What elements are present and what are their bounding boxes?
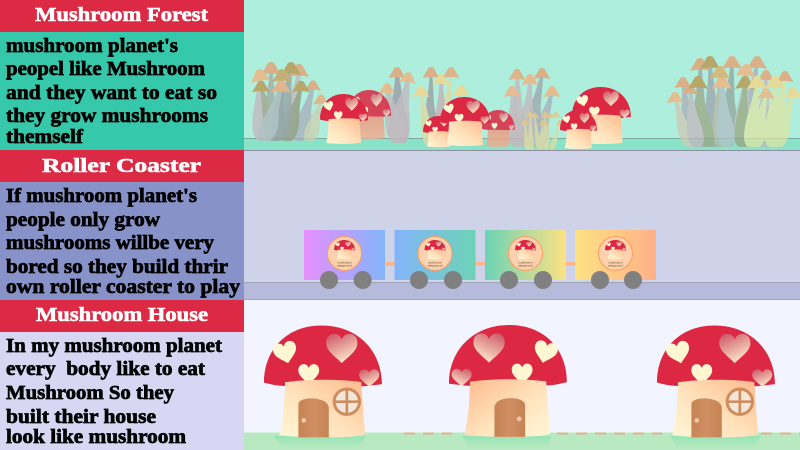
cart 2 xyxy=(394,230,476,289)
body text: roller coaster: If mushroom planet's xyxy=(6,185,197,207)
red mushroom: large right xyxy=(572,87,631,144)
body text: house: every body like to eat xyxy=(6,358,205,380)
door xyxy=(494,398,525,437)
panel: mushroom house text xyxy=(0,300,244,450)
cart 3: playground xyxy=(518,264,533,268)
red mushroom: behind centre xyxy=(482,110,515,147)
body text: house: built their house xyxy=(6,406,156,428)
cart connectors xyxy=(385,262,575,266)
heading: roller coaster: Roller Coaster xyxy=(42,155,201,177)
cart 2: mushroom xyxy=(428,260,443,264)
body text: forest: and they want to eat so xyxy=(6,82,217,104)
round window xyxy=(727,389,753,414)
body text: roller coaster: own roller coaster to play xyxy=(6,276,241,298)
door xyxy=(298,398,329,437)
heading: mushroom forest: Mushroom Forest xyxy=(35,4,208,26)
body text: forest xyxy=(6,35,217,148)
body text: forest: peopel like Mushroom xyxy=(6,58,205,80)
cart 1 xyxy=(304,230,385,289)
heading: roller coaster xyxy=(0,150,244,182)
house shadows xyxy=(273,436,761,448)
body text: roller coaster: people only grow xyxy=(6,209,160,231)
path dashes xyxy=(404,432,800,434)
cart 3 xyxy=(485,230,566,289)
body text: roller coaster xyxy=(6,185,241,298)
tall mushrooms: left cluster xyxy=(249,62,329,141)
house 2 xyxy=(449,325,567,437)
body text: house xyxy=(6,335,222,448)
tall mushrooms: middle clusters xyxy=(375,67,560,147)
cart 1: playground xyxy=(337,264,352,268)
panel: mushroom house scene xyxy=(244,300,800,450)
body text: forest: they grow mushrooms xyxy=(6,105,208,127)
cart 2: playground xyxy=(428,264,443,268)
house 1 xyxy=(264,326,382,437)
cart 4: playground xyxy=(608,264,623,268)
red mushroom: front left xyxy=(320,94,368,144)
cart 1: mushroom xyxy=(337,260,352,264)
cart 4 xyxy=(575,230,656,289)
heading: mushroom house: Mushroom House xyxy=(36,304,208,326)
round window xyxy=(334,389,360,414)
tiny mushrooms: yellow clump xyxy=(520,112,564,150)
tall mushrooms: right cluster xyxy=(666,56,800,147)
door xyxy=(691,398,722,437)
body text: forest: mushroom planet's xyxy=(6,35,178,57)
heading: mushroom forest xyxy=(0,0,244,32)
panel: roller coaster text xyxy=(0,150,244,300)
red mushroom: small right xyxy=(560,110,597,149)
body text: forest: themself xyxy=(6,126,84,148)
panel: forest scene xyxy=(244,0,800,150)
red mushroom: small centre xyxy=(423,116,455,147)
body text: house: Mushroom So they xyxy=(6,382,175,404)
cart 3: mushroom xyxy=(518,260,533,264)
house 3 xyxy=(657,326,775,437)
body text: house: look like mushroom xyxy=(6,426,186,448)
panel: mushroom forest text xyxy=(0,0,244,150)
red mushroom: behind left xyxy=(348,90,391,139)
body text: roller coaster: bored so they build thrir xyxy=(6,256,228,278)
body text: house: In my mushroom planet xyxy=(6,335,222,357)
red mushroom: front centre xyxy=(440,97,490,146)
heading: mushroom house xyxy=(0,300,244,332)
body text: roller coaster: mushrooms willbe very xyxy=(6,232,215,254)
cart 4: mushroom xyxy=(608,260,623,264)
panel: roller coaster scene xyxy=(244,150,800,300)
